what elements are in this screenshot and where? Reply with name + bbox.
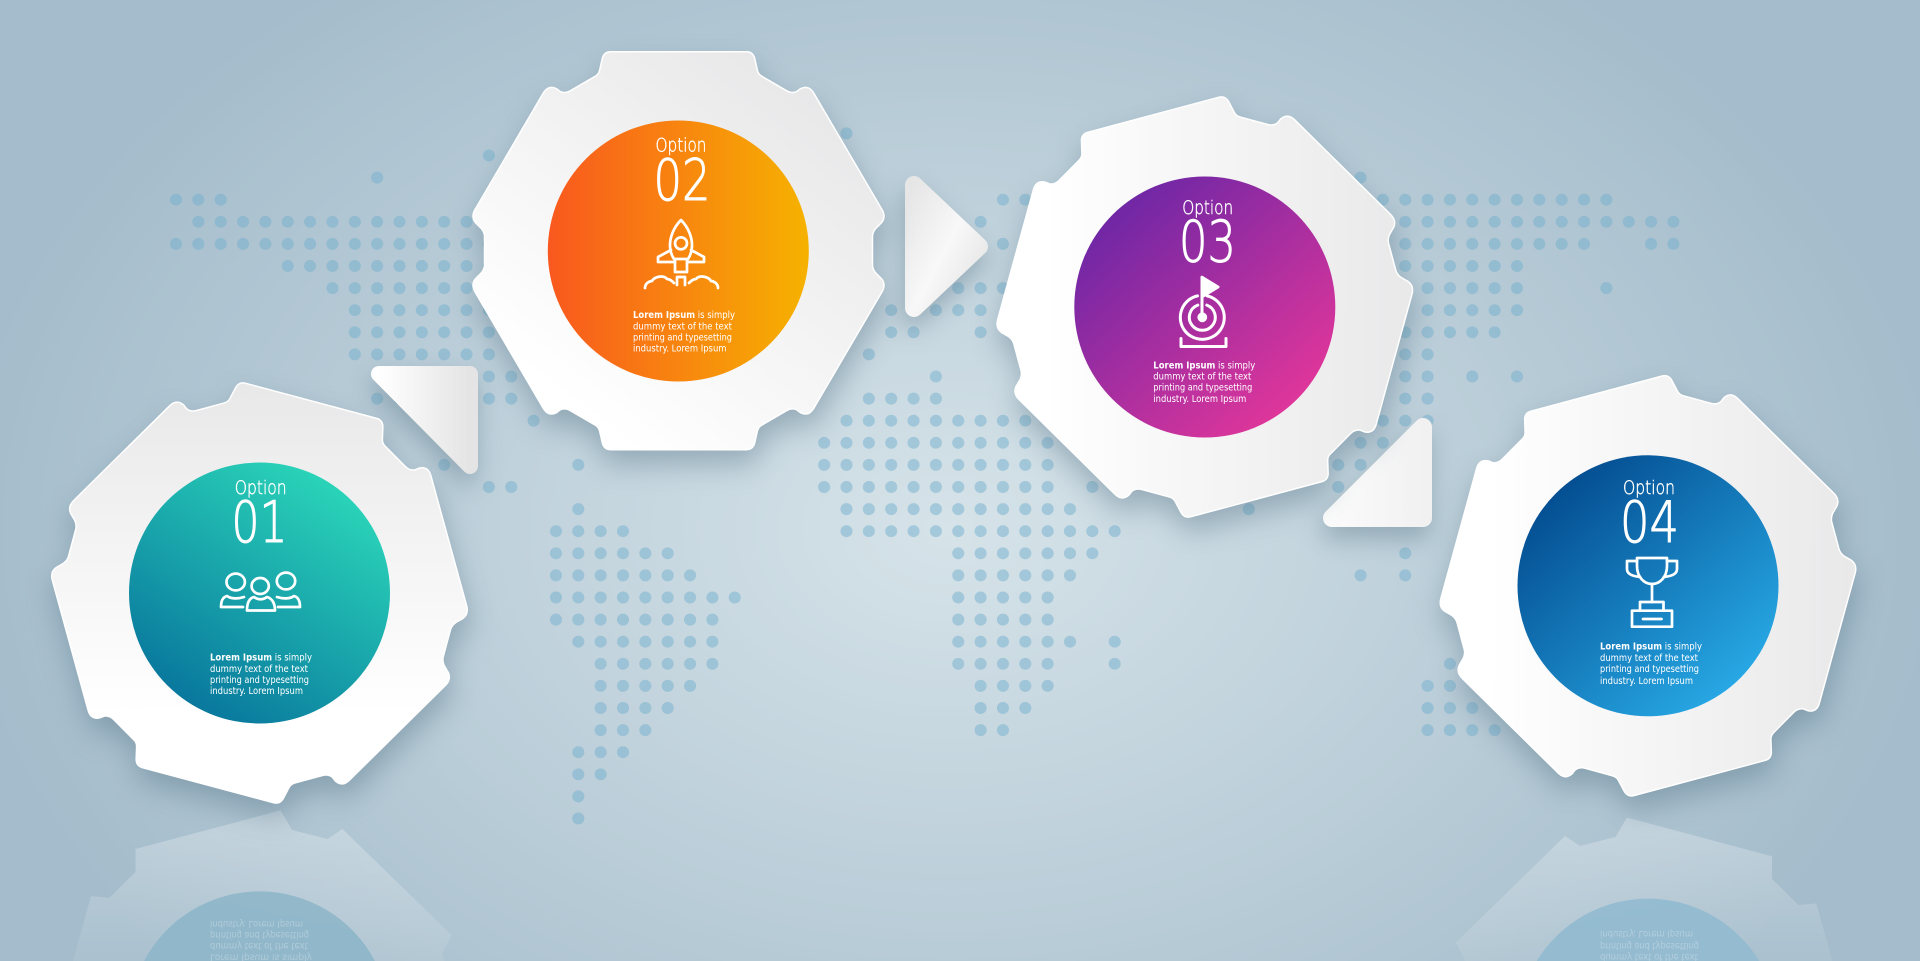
text block 01: printing and typesetting [210, 675, 309, 686]
text block 03: printing and typesetting [1153, 383, 1252, 394]
gear frame 01 [9, 348, 510, 838]
text block 01: dummy text of the text [210, 664, 308, 675]
reflection: option 01: industry. Lorem Ipsum [210, 918, 303, 929]
text block 01 [210, 652, 312, 697]
text block 03: industry. Lorem Ipsum [1153, 394, 1246, 405]
text block 03: Lorem Ipsum is simply [1153, 360, 1256, 371]
gradient circle 02 [548, 120, 809, 382]
heading: option 03: Option [1182, 197, 1233, 219]
number 04: 04 [1620, 490, 1679, 556]
icon: target with flag [1180, 277, 1226, 346]
heading: option 04: Option [1623, 477, 1675, 499]
text block 02: printing and typesetting [633, 333, 732, 344]
reflection: option 01: printing and typesetting [210, 929, 309, 940]
number 02: 02 [654, 148, 710, 214]
text block 04: industry. Lorem Ipsum [1600, 676, 1693, 687]
reflection: option 04 [1456, 818, 1832, 961]
panel: option 04 [1398, 340, 1898, 831]
gradient circle 03 [1074, 176, 1335, 438]
heading: option 02: Option [656, 135, 706, 157]
gradient circle 01 [129, 462, 390, 724]
number 03: 03 [1179, 210, 1236, 276]
text block 02: Lorem Ipsum is simply [633, 310, 735, 321]
icon: rocket [645, 220, 718, 288]
arrow: option 02 to 03 [914, 185, 979, 308]
gear frame 04 [1398, 340, 1898, 831]
reflection: option 04: industry. Lorem Ipsum [1600, 928, 1693, 939]
arrow: option 01 to 02 [379, 374, 470, 466]
number 01: 01 [232, 490, 288, 556]
text block 02: industry. Lorem Ipsum [633, 344, 726, 355]
text block 04: printing and typesetting [1600, 664, 1699, 675]
icon: trophy [1627, 558, 1677, 627]
text block 01: Lorem Ipsum is simply [210, 652, 312, 663]
panel: option 01 [9, 348, 510, 838]
panel: option 03 [955, 62, 1455, 552]
reflection: option 01: dummy text of the text [210, 940, 308, 951]
text block 04 [1600, 642, 1702, 687]
gear frame 02 [473, 52, 884, 450]
text block 03 [1153, 360, 1256, 405]
text block 04: dummy text of the text [1600, 653, 1698, 664]
text block 02 [633, 310, 735, 355]
reflection: option 04: printing and typesetting [1600, 940, 1699, 951]
text block 03: dummy text of the text [1153, 371, 1251, 382]
text block 04: Lorem Ipsum is simply [1600, 642, 1702, 653]
text block 02: dummy text of the text [633, 322, 732, 332]
heading: option 01: Option [235, 477, 287, 499]
gear frame 03 [955, 62, 1455, 552]
text block 01: industry. Lorem Ipsum [210, 686, 303, 697]
arrow: option 03 to 04 [1332, 427, 1423, 518]
icon: people [221, 573, 300, 610]
reflection: option 01 [73, 810, 452, 961]
world map of dots [176, 133, 1674, 818]
panel: option 02 [473, 52, 884, 450]
gradient circle 04 [1518, 455, 1778, 716]
